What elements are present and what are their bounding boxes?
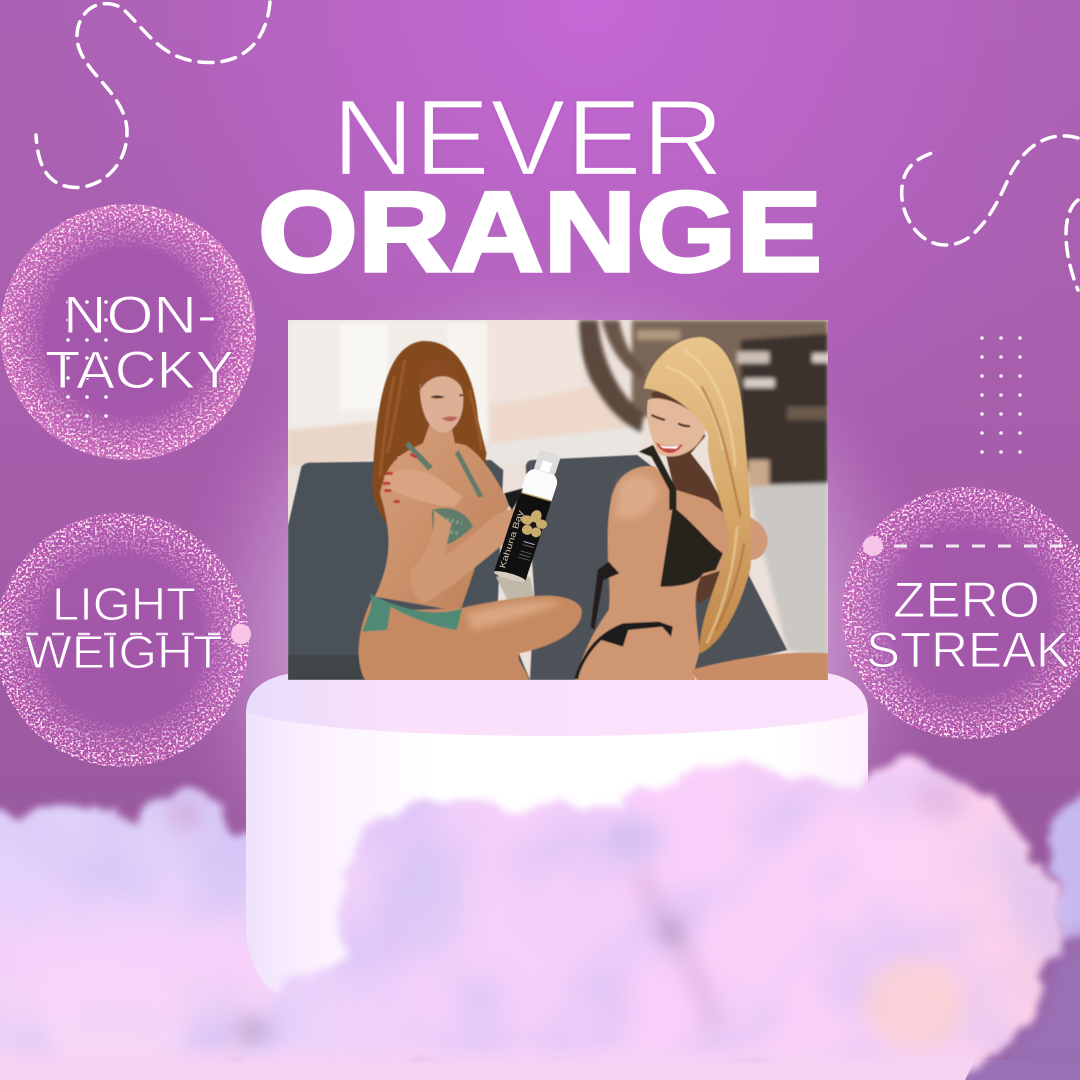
title: ORANGE [258,169,822,296]
title: NEVER [332,77,724,199]
cloud: centre and right mass in front of pedestal [240,763,1057,1072]
right woman [575,337,828,682]
spray trigger [504,488,523,510]
decorative dashed swirl right [902,136,1078,290]
cloud: bottom edge fill [0,1040,985,1080]
decorative dot grid right [980,336,1022,454]
cloud: far right lavender wisp [1047,785,1080,950]
cloud: shadows and tints [169,780,968,1050]
cloud: left, behind pedestal [0,791,300,1072]
hand holding bottle [502,508,514,514]
pedestal [246,672,868,1000]
badge: zero streak: ZERO [893,572,1040,628]
badge: zero streak: STREAK [866,622,1070,678]
photo backdrop [288,320,828,657]
badge: non-tacky: TACKY [45,341,234,400]
badge: light weight [0,513,251,767]
badge: zero streak [842,487,1080,739]
left woman [359,341,582,682]
lower right dark mist [985,925,1080,1070]
badge: non-tacky: NON- [63,286,217,345]
product bottle: Kahuna Bay [497,508,526,569]
photo: two women on a sun lounger with product bottle [288,320,828,682]
product bottle [494,450,560,582]
badge: light weight: LIGHT [52,578,196,630]
loungers [288,455,787,680]
badge: non-tacky [0,204,256,460]
decorative dashed swirl top left [36,2,270,187]
title [258,77,822,296]
badge: light weight: WEIGHT [25,626,223,678]
